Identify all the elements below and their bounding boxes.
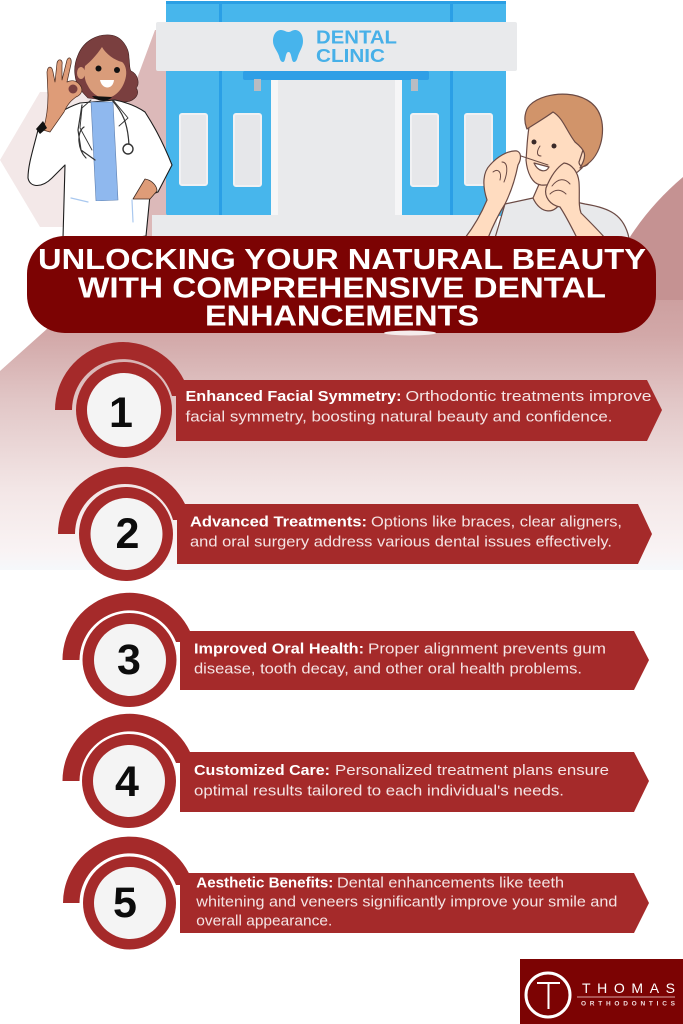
number ring xyxy=(79,487,173,581)
number: 1 xyxy=(109,389,133,437)
teeth xyxy=(534,163,549,171)
background: fading gradient band xyxy=(0,300,683,570)
number ring xyxy=(82,613,176,707)
stethoscope xyxy=(78,100,129,160)
background: pale hexagon xyxy=(0,92,170,227)
number disc xyxy=(94,867,166,939)
logo circle xyxy=(526,973,570,1017)
ear xyxy=(579,149,591,166)
banner xyxy=(177,504,652,564)
hair xyxy=(75,35,138,102)
description: Customized Care: xyxy=(194,763,330,779)
title pill background xyxy=(27,236,656,333)
item 4 xyxy=(62,714,649,828)
description xyxy=(194,641,606,678)
description: and oral surgery address various dental issues effectively. xyxy=(190,534,612,550)
right hand finger lines xyxy=(550,180,570,194)
stethoscope chest piece xyxy=(123,144,133,154)
icon: tooth xyxy=(273,30,303,62)
head xyxy=(526,105,586,185)
description xyxy=(194,763,609,800)
title line 1: UNLOCKING YOUR NATURAL BEAUTY xyxy=(38,244,646,276)
sign text: dental clinic: CLINIC xyxy=(316,46,385,66)
lapels xyxy=(80,100,128,150)
description: Personalized treatment plans ensure xyxy=(335,763,609,779)
description xyxy=(186,389,652,426)
shirt xyxy=(91,102,118,201)
description: Improved Oral Health: xyxy=(194,641,364,657)
description: facial symmetry, boosting natural beauty and confidence. xyxy=(186,410,612,426)
description: Proper alignment prevents gum xyxy=(368,641,606,657)
number: 3 xyxy=(117,636,141,684)
arch xyxy=(58,467,185,534)
face xyxy=(84,47,126,98)
banner xyxy=(180,873,649,933)
shirt xyxy=(495,198,629,238)
number disc xyxy=(87,373,161,447)
neck xyxy=(533,170,572,211)
sign text: dental clinic xyxy=(316,28,397,66)
finger ring hole xyxy=(68,84,78,94)
title line 3: ENHANCEMENTS xyxy=(205,300,479,332)
logo T mark xyxy=(537,983,560,1009)
left eye xyxy=(532,140,536,144)
number disc xyxy=(90,498,162,570)
description: Advanced Treatments: xyxy=(190,514,367,530)
title line 2: WITH COMPREHENSIVE DENTAL xyxy=(78,272,606,304)
number ring xyxy=(76,362,172,458)
logo subtitle: ORTHODONTICS xyxy=(581,1000,676,1008)
right hand and arm xyxy=(546,163,605,238)
illustration: doctor xyxy=(28,35,172,240)
background: pink diagonal panel xyxy=(55,30,480,300)
item 1 xyxy=(55,342,662,458)
sliver under title xyxy=(384,330,436,336)
number ring xyxy=(83,856,176,950)
number disc xyxy=(93,745,165,817)
left eye xyxy=(96,66,102,72)
description: whitening and veneers significantly improve your smile and xyxy=(195,895,617,911)
skirt xyxy=(95,201,119,239)
description: optimal results tailored to each individual's needs. xyxy=(194,784,564,800)
arch xyxy=(62,593,190,660)
description xyxy=(195,875,617,930)
illustration: dental clinic building xyxy=(152,1,517,239)
background: dark pink curve on right xyxy=(600,177,683,300)
right eye xyxy=(552,144,556,148)
number disc xyxy=(94,624,166,696)
item 5 xyxy=(63,837,649,950)
number ring xyxy=(82,734,176,828)
ear xyxy=(77,67,85,79)
right eye xyxy=(114,67,120,73)
description: disease, tooth decay, and other oral health problems. xyxy=(194,662,582,678)
logo background xyxy=(520,959,683,1024)
floss xyxy=(518,155,548,165)
number: 2 xyxy=(116,510,139,558)
title banner xyxy=(27,236,656,333)
left hand and arm xyxy=(465,151,520,238)
arch xyxy=(55,342,184,410)
hand in pocket xyxy=(133,179,157,199)
collar shadow xyxy=(92,96,112,101)
description: Dental enhancements like teeth xyxy=(337,875,564,891)
item 3 xyxy=(62,593,649,707)
sign text: dental clinic: DENTAL xyxy=(316,28,397,48)
nose xyxy=(537,146,541,156)
banner xyxy=(180,752,649,812)
item 2 xyxy=(58,467,652,581)
smile xyxy=(100,80,114,88)
left hand finger lines xyxy=(493,162,507,182)
hair xyxy=(525,94,603,168)
coat xyxy=(28,100,172,240)
arch xyxy=(62,714,190,781)
arch xyxy=(63,837,189,903)
banner xyxy=(176,380,662,441)
illustration: man flossing xyxy=(465,94,629,238)
number: 4 xyxy=(115,758,139,806)
description: overall appearance. xyxy=(196,914,332,930)
logo: Thomas Orthodontics xyxy=(520,959,683,1024)
description: Orthodontic treatments improve xyxy=(406,389,652,405)
number: 5 xyxy=(113,879,137,927)
description: Options like braces, clear aligners, xyxy=(371,514,622,530)
arm cuff xyxy=(36,121,47,134)
description xyxy=(190,514,622,550)
description: Aesthetic Benefits: xyxy=(196,875,333,891)
pocket detail xyxy=(71,198,133,222)
logo divider xyxy=(577,996,675,998)
logo name: THOMAS xyxy=(582,980,675,996)
raised hand xyxy=(43,58,82,132)
banner xyxy=(180,631,649,690)
description: Enhanced Facial Symmetry: xyxy=(186,389,402,405)
